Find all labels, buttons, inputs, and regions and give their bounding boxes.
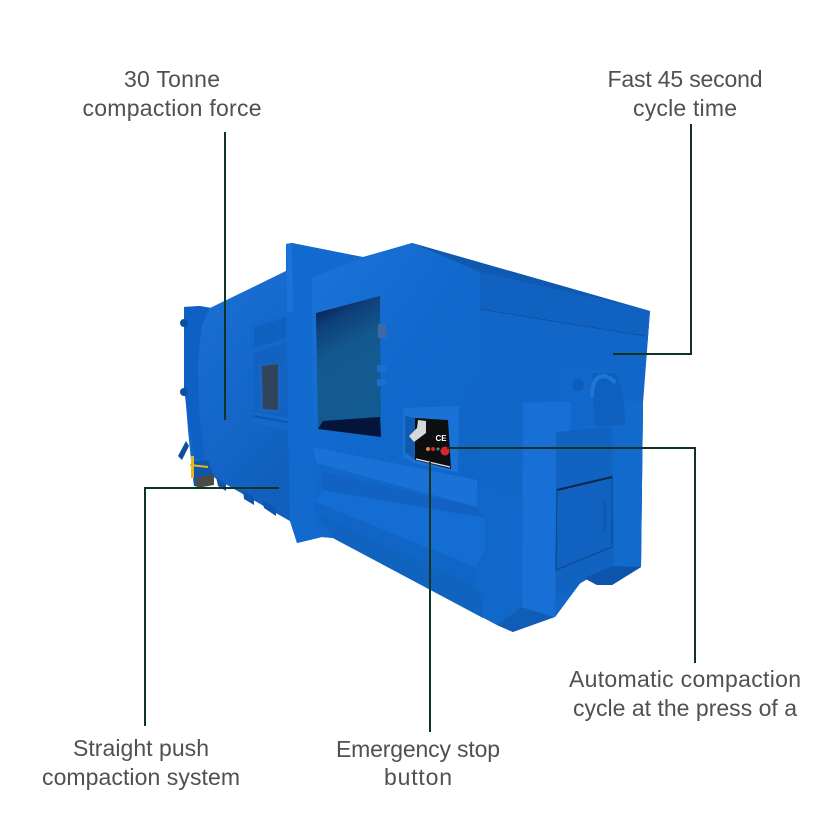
side door recess bbox=[556, 426, 614, 598]
label: straight push system bbox=[42, 735, 240, 790]
power socket bbox=[409, 420, 426, 442]
compactor machine photo bbox=[178, 243, 650, 632]
label: fast cycle time bbox=[608, 66, 762, 121]
right side face bbox=[480, 272, 650, 617]
vertical divider plate bbox=[286, 243, 364, 543]
main front panel bbox=[312, 243, 480, 482]
machine silhouette bbox=[184, 243, 650, 632]
lower front sections bbox=[313, 447, 555, 632]
line: emergency stop bbox=[429, 462, 431, 732]
label: 30 tonne compaction force: 30 Tonne bbox=[124, 66, 220, 92]
label: fast cycle time: Fast 45 second bbox=[608, 66, 762, 92]
line: cycle time bbox=[613, 124, 691, 354]
label: emergency stop button bbox=[336, 736, 500, 790]
label: straight push system: compaction system bbox=[42, 764, 240, 790]
label: automatic compaction bbox=[569, 666, 801, 721]
rear body bbox=[198, 271, 290, 521]
hopper latches bbox=[377, 324, 386, 386]
label: emergency stop button: button bbox=[384, 764, 452, 790]
underside feet bbox=[216, 477, 276, 516]
label: straight push system: Straight push bbox=[73, 735, 209, 761]
roof bbox=[412, 243, 650, 311]
label: automatic compaction: cycle at the press of a bbox=[573, 695, 797, 721]
door hinges bbox=[293, 320, 307, 425]
label: fast cycle time: cycle time bbox=[633, 95, 737, 121]
side inspection door bbox=[250, 313, 295, 432]
control panel box bbox=[403, 406, 459, 473]
CE mark: CE bbox=[435, 434, 447, 443]
leader lines bbox=[145, 124, 695, 732]
rear door bbox=[178, 306, 210, 462]
roller foot bbox=[190, 456, 214, 488]
label: automatic compaction: Automatic compaction bbox=[569, 666, 801, 692]
emergency stop button bbox=[440, 446, 450, 456]
label: 30 tonne compaction force bbox=[82, 66, 262, 121]
hopper opening bbox=[316, 296, 381, 437]
black control panel bbox=[415, 418, 451, 469]
line: compaction force bbox=[224, 132, 226, 420]
hook bracket bbox=[562, 368, 643, 567]
label: 30 tonne compaction force: compaction force bbox=[82, 95, 262, 121]
label: emergency stop button: Emergency stop bbox=[336, 736, 500, 762]
base skid bbox=[584, 566, 641, 585]
front column bbox=[522, 402, 571, 617]
line: automatic compaction bbox=[447, 448, 695, 663]
line: straight push bbox=[145, 488, 279, 726]
